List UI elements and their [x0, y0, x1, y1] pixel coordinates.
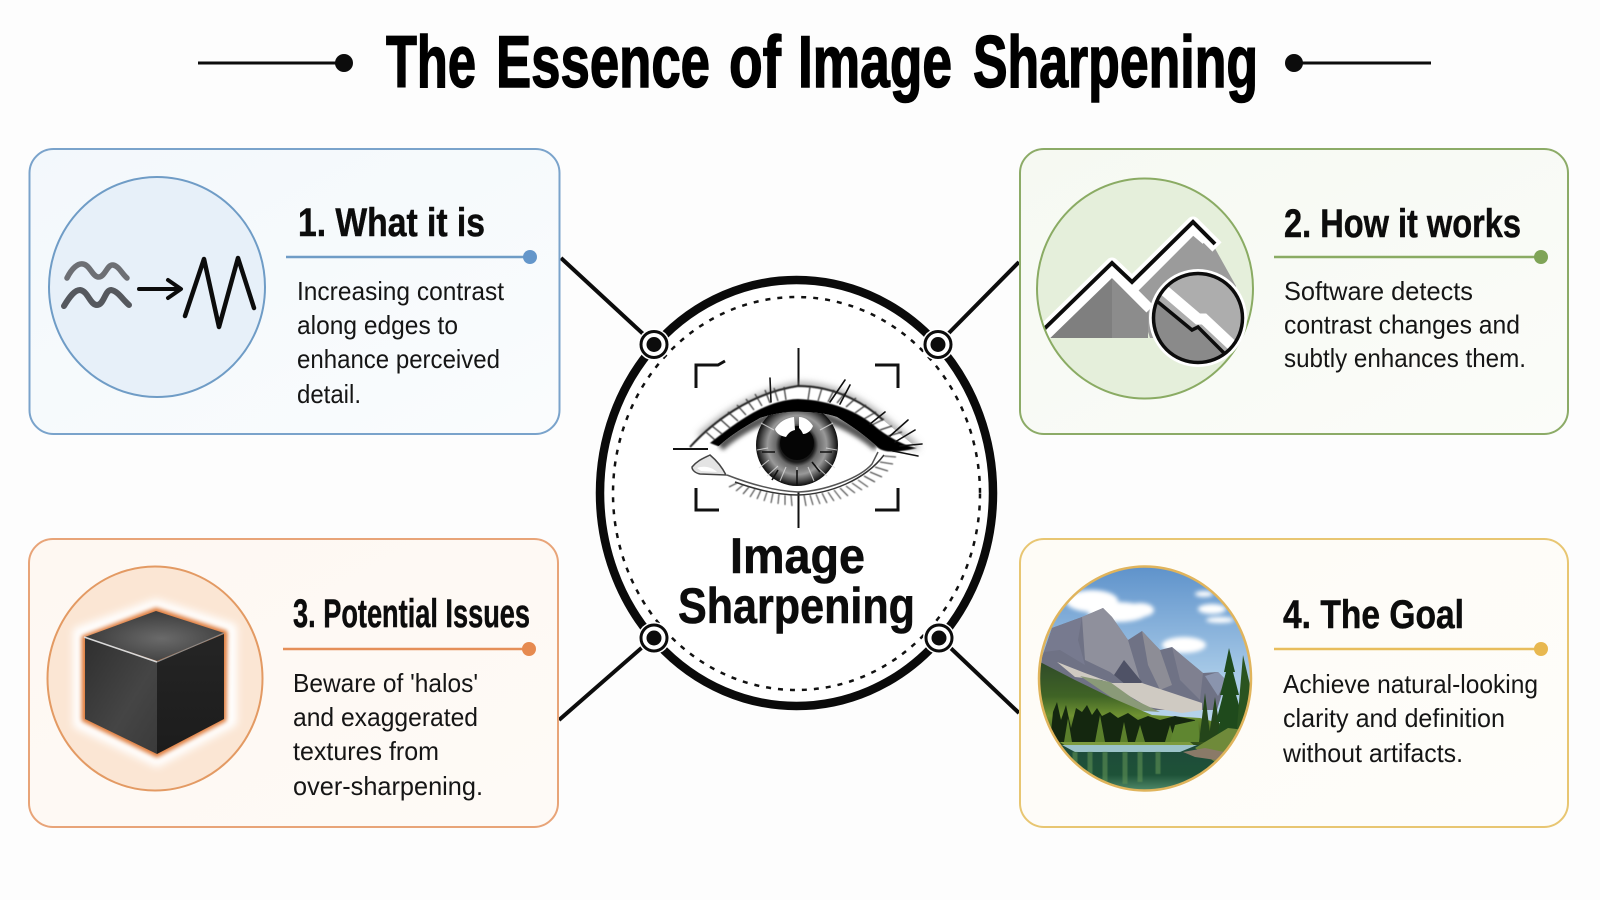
title left rule — [198, 54, 353, 72]
title with flanking rules — [198, 22, 1431, 103]
heading: potential issues: 3. Potential Issues — [293, 592, 530, 636]
clouds — [1066, 590, 1234, 653]
body text: without artifacts. — [1282, 738, 1463, 768]
title text: Image — [798, 22, 952, 103]
icon: mountain lake photo — [1035, 560, 1260, 795]
title text: The — [386, 22, 476, 103]
icon: crosshair — [673, 348, 798, 528]
eye: crease and lash band — [690, 386, 917, 450]
hub label: Image — [730, 528, 865, 584]
body text: subtly enhances them. — [1284, 343, 1526, 373]
hub outer ring — [600, 280, 993, 706]
body text — [1284, 276, 1526, 373]
eye: soft shadow above crease — [700, 386, 917, 448]
trees dark — [1050, 702, 1198, 742]
body text — [297, 276, 505, 409]
body text: and exaggerated — [293, 702, 478, 732]
hub label: Sharpening — [678, 578, 915, 634]
body text: clarity and definition — [1283, 703, 1505, 733]
hub label — [678, 528, 915, 634]
eye: lower lashes — [729, 456, 896, 506]
body text: Beware of 'halos' — [293, 668, 478, 698]
snow slope — [1057, 662, 1202, 713]
body text: over-sharpening. — [293, 771, 483, 801]
body text: detail. — [297, 379, 361, 409]
body text: Achieve natural-looking — [1283, 669, 1538, 699]
mountains — [1040, 608, 1226, 710]
lake — [1062, 745, 1214, 790]
heading rule — [286, 250, 537, 264]
title text: Sharpening — [973, 22, 1258, 103]
heading rule — [1274, 642, 1548, 656]
body text: along edges to — [297, 310, 458, 340]
eye: long lashes — [770, 378, 922, 456]
eye: lower lid lines — [727, 452, 878, 492]
icon: mountains with magnifier — [1037, 178, 1253, 398]
panel: 3 potential issues — [29, 539, 558, 827]
icon: waves to sharp zigzag — [49, 177, 265, 397]
right trees — [1199, 694, 1220, 742]
icon: eye — [690, 378, 922, 506]
central hub — [600, 280, 993, 706]
icon: cube with halo — [48, 566, 262, 790]
heading: what it is: 1. What it is — [298, 201, 485, 245]
forest — [1040, 662, 1220, 745]
eye: inner corner — [692, 455, 726, 475]
heading rule — [1274, 250, 1548, 264]
hub dotted ring — [613, 297, 980, 690]
icon: focus brackets — [696, 361, 898, 510]
connector lines — [559, 258, 1019, 720]
title right rule — [1285, 54, 1431, 72]
eye: eyeball — [692, 412, 877, 492]
body text: Software detects — [1284, 276, 1473, 306]
body text: enhance perceived — [297, 344, 500, 374]
body text: contrast changes and — [1284, 310, 1520, 340]
body text — [293, 668, 483, 801]
panel: 4 the goal — [1020, 539, 1568, 827]
heading: the goal: 4. The Goal — [1283, 593, 1464, 637]
panel: 2 how it works — [1020, 149, 1568, 434]
heading: how it works: 2. How it works — [1284, 202, 1521, 246]
body text: Increasing contrast — [297, 276, 505, 306]
body text — [1282, 669, 1538, 768]
eye: hatched lashes — [706, 387, 902, 440]
connector nodes — [638, 328, 955, 654]
title text: of — [729, 22, 782, 103]
body text: textures from — [293, 736, 439, 766]
panel: 1 what it is — [30, 149, 560, 434]
heading rule — [283, 642, 536, 656]
title text: Essence — [496, 22, 710, 103]
